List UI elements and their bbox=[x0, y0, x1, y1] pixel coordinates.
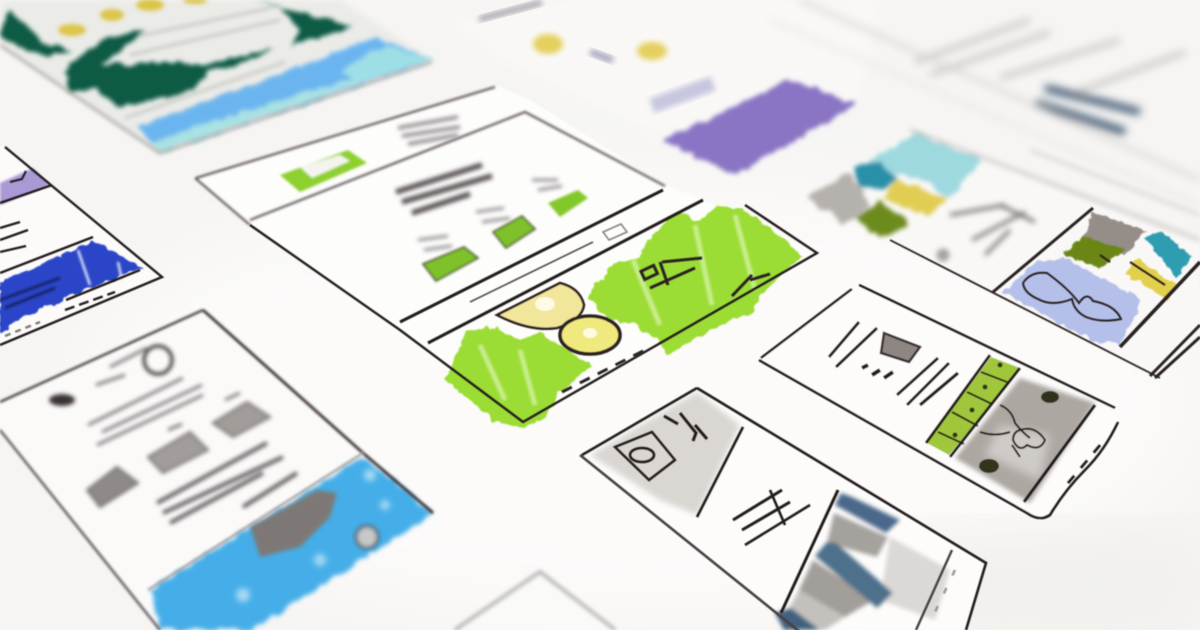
outlines and text lines bbox=[0, 147, 162, 345]
blue and gray blocks bbox=[775, 493, 950, 630]
coloured pencil patches, upper left bbox=[807, 132, 982, 238]
sketch: right multi-colour card bbox=[805, 130, 1200, 378]
paper streaks in the green bbox=[480, 215, 755, 405]
sketch: centre wireframe with green highlights bbox=[195, 85, 817, 428]
card paper bbox=[197, 85, 817, 422]
small green buttons bbox=[280, 150, 588, 281]
sketch: bottom blurred partial card bbox=[455, 572, 615, 630]
outlines bbox=[890, 208, 1200, 378]
sketch: top-middle card with yellow marks bbox=[450, 0, 880, 174]
sketch: right phone card with green strip bbox=[759, 285, 1118, 520]
pale gray shaded panel bbox=[590, 392, 740, 515]
sketch: top-left green and blue card bbox=[0, 0, 433, 153]
gray image panel bbox=[955, 378, 1095, 503]
blue marker panel bbox=[0, 240, 142, 332]
sketch: bottom-left card with blue panel bbox=[0, 310, 433, 630]
dots on image bbox=[1041, 391, 1059, 403]
blue image panel bbox=[150, 457, 433, 630]
sketch: far-left card with blue panel bbox=[0, 145, 162, 347]
dark green marker bbox=[0, 0, 353, 108]
card paper bbox=[0, 0, 433, 153]
yellow marks bbox=[58, 0, 207, 36]
blue panel bbox=[137, 37, 433, 153]
gray scribble blocks bbox=[49, 346, 297, 523]
card edge bbox=[0, 45, 432, 153]
outlines bbox=[0, 310, 433, 630]
yellow circles bbox=[497, 283, 620, 354]
gray shape in panel bbox=[250, 490, 337, 557]
purple cell bbox=[0, 168, 50, 205]
scribbles and dashes on green bbox=[562, 258, 770, 392]
scribbled text bbox=[396, 117, 562, 250]
sketch: top-right blurred text card bbox=[770, 0, 1200, 205]
green strip bbox=[927, 357, 1020, 455]
icon box bbox=[881, 333, 920, 362]
gray scribbled interior bbox=[120, 8, 295, 125]
outlines: focused lower card bbox=[250, 190, 817, 422]
sketch: bottom card with gray and blue panels bbox=[580, 388, 986, 630]
green image panel bbox=[445, 205, 802, 428]
coloured pencil patches, lower right bbox=[1003, 212, 1192, 345]
outlines: blurred upper card bbox=[195, 87, 665, 225]
purple block bbox=[663, 79, 858, 174]
blurred text and top edge bbox=[910, 130, 1200, 259]
